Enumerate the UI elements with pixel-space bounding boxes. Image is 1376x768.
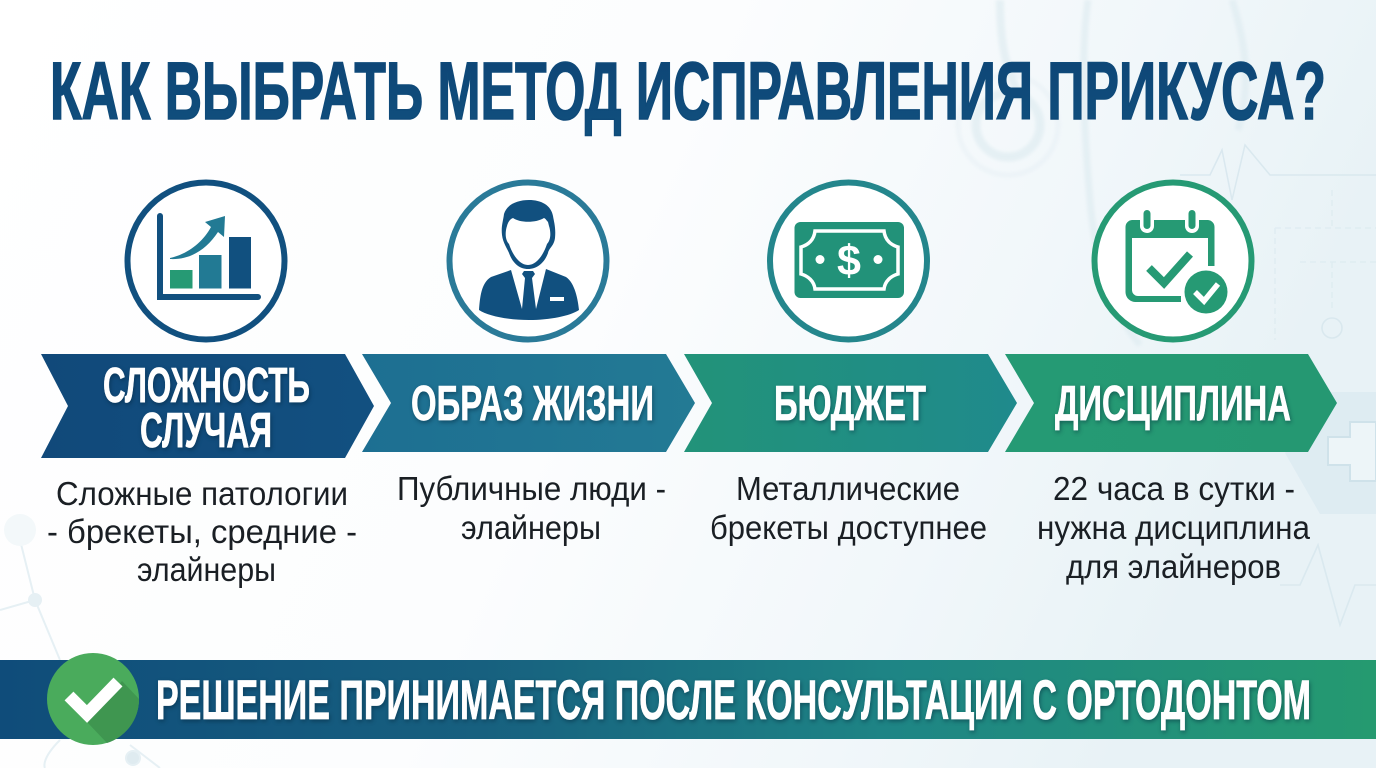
arrow banner 3 — [684, 354, 1017, 452]
description: - брекеты, средние - — [47, 513, 357, 550]
description: Публичные люди - — [397, 470, 666, 507]
description: нужна дисциплина — [1037, 509, 1311, 546]
hexagon and cross watermark — [1285, 392, 1376, 514]
ECG line watermark — [1180, 145, 1376, 625]
icon: calendar with check — [1094, 182, 1252, 340]
heading: ОБРАЗ ЖИЗНИ — [411, 377, 654, 431]
description: для элайнеров — [1066, 548, 1281, 585]
heading: СЛОЖНОСТЬ — [103, 359, 310, 413]
arrow banner 1 — [41, 354, 374, 458]
arrow banner 4 — [1005, 354, 1337, 452]
icon: green check badge — [47, 653, 139, 745]
description: Сложные патологии — [56, 475, 348, 512]
heading: БЮДЖЕТ — [774, 377, 926, 431]
description: элайнеры — [461, 509, 601, 546]
description — [47, 475, 357, 588]
bottom banner — [0, 653, 1376, 745]
description — [710, 470, 987, 546]
description — [1037, 470, 1311, 585]
panel: бюджет — [684, 354, 1017, 546]
icon: chart with rising arrow — [128, 182, 284, 340]
icon: person in suit — [450, 182, 606, 340]
panel: дисциплина — [1005, 354, 1337, 585]
icon: banknote with dollar — [770, 182, 927, 340]
panel: сложность случая — [41, 354, 374, 588]
description: Металлические — [736, 470, 960, 507]
description: элайнеры — [137, 551, 276, 588]
panel: сложность случая: СЛУЧАЯ — [140, 404, 272, 458]
description: брекеты доступнее — [710, 509, 987, 546]
molecule watermark — [0, 514, 160, 768]
stethoscope watermark — [958, 0, 1246, 345]
icon: banknote with dollar: $ — [837, 237, 861, 285]
description — [397, 470, 666, 546]
description: 22 часа в сутки - — [1053, 470, 1295, 507]
arrow banner 2 — [362, 354, 695, 452]
panel: образ жизни — [362, 354, 695, 546]
